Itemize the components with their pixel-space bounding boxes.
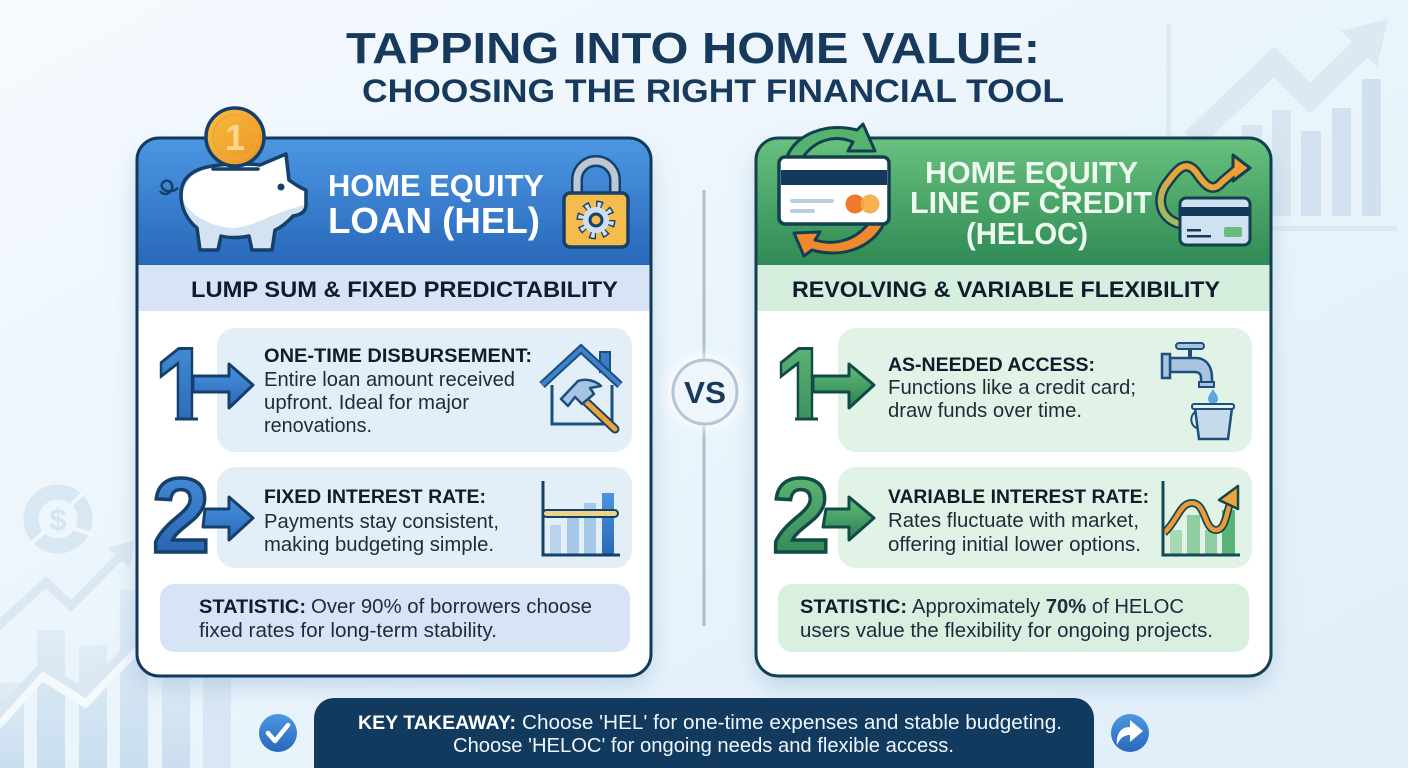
item 2 card <box>217 467 632 568</box>
heading: home equity line of credit <box>910 155 1152 251</box>
icon: bar chart with fixed line <box>543 481 620 555</box>
panel: home equity line of credit <box>756 124 1271 676</box>
subheading band <box>757 265 1270 311</box>
panel border <box>137 138 651 676</box>
panel border <box>756 138 1271 676</box>
item 2 text: Rates fluctuate with market, <box>888 510 1139 532</box>
number 2 with arrow: 2 <box>772 457 830 575</box>
subheading band: REVOLVING & VARIABLE FLEXIBILITY <box>792 277 1220 302</box>
statistic callout: users value the flexibility for ongoing projects. <box>800 620 1213 642</box>
item 2 text: VARIABLE INTEREST RATE: <box>888 487 1149 508</box>
item 1 text <box>264 346 532 437</box>
title: CHOOSING THE RIGHT FINANCIAL TOOL <box>362 73 1064 109</box>
number 1 with arrow: 1 <box>154 321 211 463</box>
vs divider <box>667 190 743 626</box>
background decoration: bottom-left chart and coin <box>0 488 231 768</box>
item 2 text <box>264 487 499 556</box>
panel shadows <box>137 150 1271 686</box>
item 1 text: Functions like a credit card; <box>888 377 1136 399</box>
icon: wavy arrow and card <box>1161 155 1250 245</box>
number 2 with arrow <box>152 457 253 575</box>
item 1 text: ONE-TIME DISBURSEMENT: <box>264 346 532 367</box>
item 2: fixed interest rate <box>152 457 632 575</box>
item 1 card <box>838 328 1252 452</box>
icon: faucet and bucket <box>1162 343 1234 439</box>
vs divider: VS <box>684 375 726 410</box>
icon: house with hammer <box>542 349 620 429</box>
icon: credit card with cycle arrows <box>779 124 889 256</box>
icon: piggy bank with coin: 1 <box>225 117 245 158</box>
icon: padlock with gear <box>564 161 628 247</box>
panel header <box>756 138 1271 265</box>
item 1 card <box>217 328 632 452</box>
statistic callout: Approximately 70% of HELOC <box>912 596 1184 618</box>
item 2 text: making budgeting simple. <box>264 534 494 556</box>
background decoration: top-right growth chart <box>1166 19 1397 231</box>
statistic callout: STATISTIC: <box>800 597 907 618</box>
heading: home equity line of credit: HOME EQUITY <box>925 155 1138 190</box>
title: TAPPING INTO HOME VALUE: <box>346 24 1040 73</box>
statistic callout <box>778 584 1249 652</box>
key takeaway bar: Choose 'HEL' for one-time expenses and stable budgeting. <box>522 712 1062 734</box>
item 1 text: Entire loan amount received <box>264 369 515 391</box>
panel header <box>137 138 651 265</box>
heading: home equity loan <box>328 168 544 241</box>
subheading band: LUMP SUM & FIXED PREDICTABILITY <box>191 277 618 302</box>
item 1 text: renovations. <box>264 415 372 437</box>
key takeaway bar: KEY TAKEAWAY: <box>358 712 516 734</box>
panel: home equity loan <box>137 108 651 676</box>
number 1 with arrow <box>780 347 876 420</box>
number 1 with arrow: 1 <box>774 321 831 463</box>
icon: piggy bank with coin <box>160 108 306 250</box>
number 2 with arrow: 2 <box>152 457 210 575</box>
statistic callout: STATISTIC: <box>199 597 306 618</box>
icon: check mark badge <box>259 714 297 752</box>
background decoration: bottom-left chart and coin: $ <box>49 502 67 537</box>
statistic callout <box>160 584 630 652</box>
key takeaway bar: Choose 'HELOC' for ongoing needs and flexible access. <box>453 735 954 757</box>
heading: home equity line of credit: (HELOC) <box>966 216 1088 251</box>
icon: variable rate chart <box>1163 481 1240 555</box>
item 1: as-needed access <box>780 328 1252 452</box>
subheading band <box>138 265 650 311</box>
item 1 text: AS-NEEDED ACCESS: <box>888 355 1095 376</box>
item 1: one-time disbursement <box>160 328 632 452</box>
title <box>346 24 1064 109</box>
statistic callout: Over 90% of borrowers choose <box>311 596 592 618</box>
number 2 with arrow <box>772 457 874 575</box>
heading: home equity line of credit: LINE OF CREDIT <box>910 185 1152 220</box>
item 2 text: offering initial lower options. <box>888 534 1141 556</box>
item 1 text: draw funds over time. <box>888 400 1082 422</box>
panel body <box>756 138 1271 676</box>
heading: home equity loan: LOAN (HEL) <box>328 200 540 241</box>
item 2 text: Payments stay consistent, <box>264 511 499 533</box>
item 2 text: FIXED INTEREST RATE: <box>264 487 486 508</box>
item 2: variable interest rate <box>772 457 1252 575</box>
item 1 text <box>888 355 1136 422</box>
item 2 text <box>888 487 1149 556</box>
number 1 with arrow <box>160 347 255 420</box>
panel body <box>137 138 651 676</box>
item 2 card <box>838 467 1252 568</box>
key takeaway bar <box>314 698 1094 768</box>
item 1 text: upfront. Ideal for major <box>264 392 469 414</box>
statistic callout: fixed rates for long-term stability. <box>199 620 497 642</box>
heading: home equity loan: HOME EQUITY <box>328 168 544 203</box>
icon: forward arrow badge <box>1111 714 1149 752</box>
